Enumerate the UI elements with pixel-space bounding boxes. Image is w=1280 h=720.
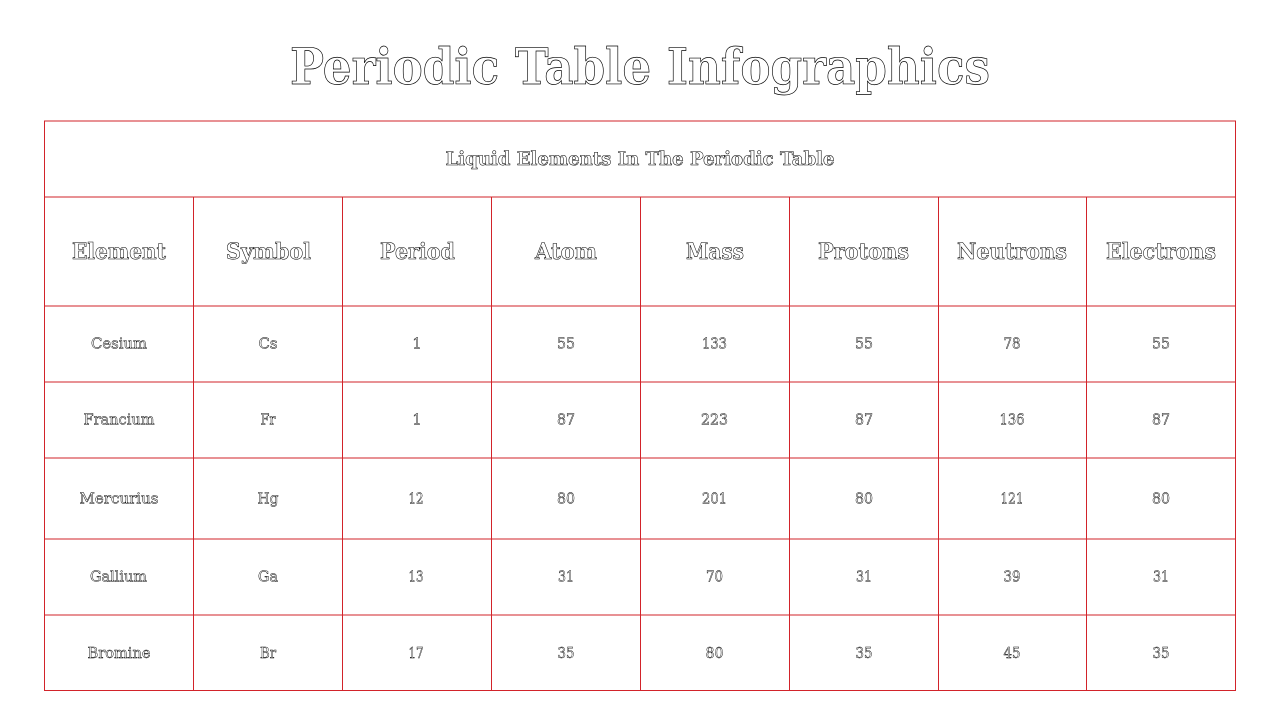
header row: Element <box>72 239 167 265</box>
row: Cesium: 78 <box>1004 336 1020 352</box>
row: Francium: 136 <box>1000 412 1024 428</box>
row: Gallium <box>90 570 1169 586</box>
row: Gallium: 31 <box>1153 570 1169 586</box>
row: Cesium: 55 <box>1152 336 1170 352</box>
row: Francium: 87 <box>855 412 873 428</box>
row: Bromine: 35 <box>1152 646 1170 662</box>
row: Francium: 87 <box>1152 412 1170 428</box>
row: Cesium: 133 <box>702 336 727 352</box>
row: Francium: 1 <box>412 412 422 428</box>
row: Bromine: Br <box>260 646 276 662</box>
header row: Atom <box>534 239 597 265</box>
header row <box>72 239 1216 265</box>
row: Bromine: 80 <box>706 646 724 662</box>
row: Gallium: 70 <box>706 570 723 586</box>
row: Gallium: 31 <box>558 570 574 586</box>
row: Mercurius: 121 <box>1000 492 1024 508</box>
row: Bromine: 45 <box>1004 646 1020 662</box>
header row: Symbol <box>226 239 311 265</box>
row: Cesium: Cesium <box>91 336 147 352</box>
table grid <box>44 121 1236 691</box>
row: Bromine: Bromine <box>88 646 150 662</box>
row: Cesium <box>91 336 1170 352</box>
row: Cesium: Cs <box>258 336 278 352</box>
row: Mercurius: 80 <box>855 492 873 508</box>
row: Mercurius: 12 <box>408 492 424 508</box>
row: Francium: 223 <box>701 412 728 428</box>
row: Bromine <box>88 646 1170 662</box>
title: Periodic Table Infographics <box>290 37 990 96</box>
row: Francium <box>84 412 1170 428</box>
header row: Neutrons <box>957 239 1067 265</box>
row: Gallium: 13 <box>408 570 424 586</box>
row: Mercurius: 201 <box>702 492 727 508</box>
row: Cesium: 55 <box>855 336 873 352</box>
row: Mercurius <box>80 492 1170 508</box>
row: Francium: Fr <box>260 412 276 428</box>
row: Mercurius: Mercurius <box>80 492 158 508</box>
row: Bromine: 35 <box>856 646 872 662</box>
row: Gallium: Ga <box>258 570 278 586</box>
row: Bromine: 17 <box>408 646 424 662</box>
row: Mercurius: 80 <box>1152 492 1170 508</box>
row: Mercurius: 80 <box>557 492 575 508</box>
table caption: Liquid Elements In The Periodic Table <box>446 148 834 170</box>
row: Gallium: 39 <box>1004 570 1020 586</box>
row: Mercurius: Hg <box>258 492 278 508</box>
row: Cesium: 55 <box>557 336 575 352</box>
row: Francium: 87 <box>557 412 575 428</box>
row: Francium: Francium <box>84 412 155 428</box>
row: Bromine: 35 <box>558 646 574 662</box>
header row: Electrons <box>1106 239 1216 265</box>
row: Gallium: 31 <box>856 570 872 586</box>
row: Gallium: Gallium <box>90 570 147 586</box>
row: Cesium: 1 <box>412 336 422 352</box>
header row: Period <box>380 239 455 265</box>
header row: Mass <box>686 239 744 265</box>
header row: Protons <box>818 239 909 265</box>
